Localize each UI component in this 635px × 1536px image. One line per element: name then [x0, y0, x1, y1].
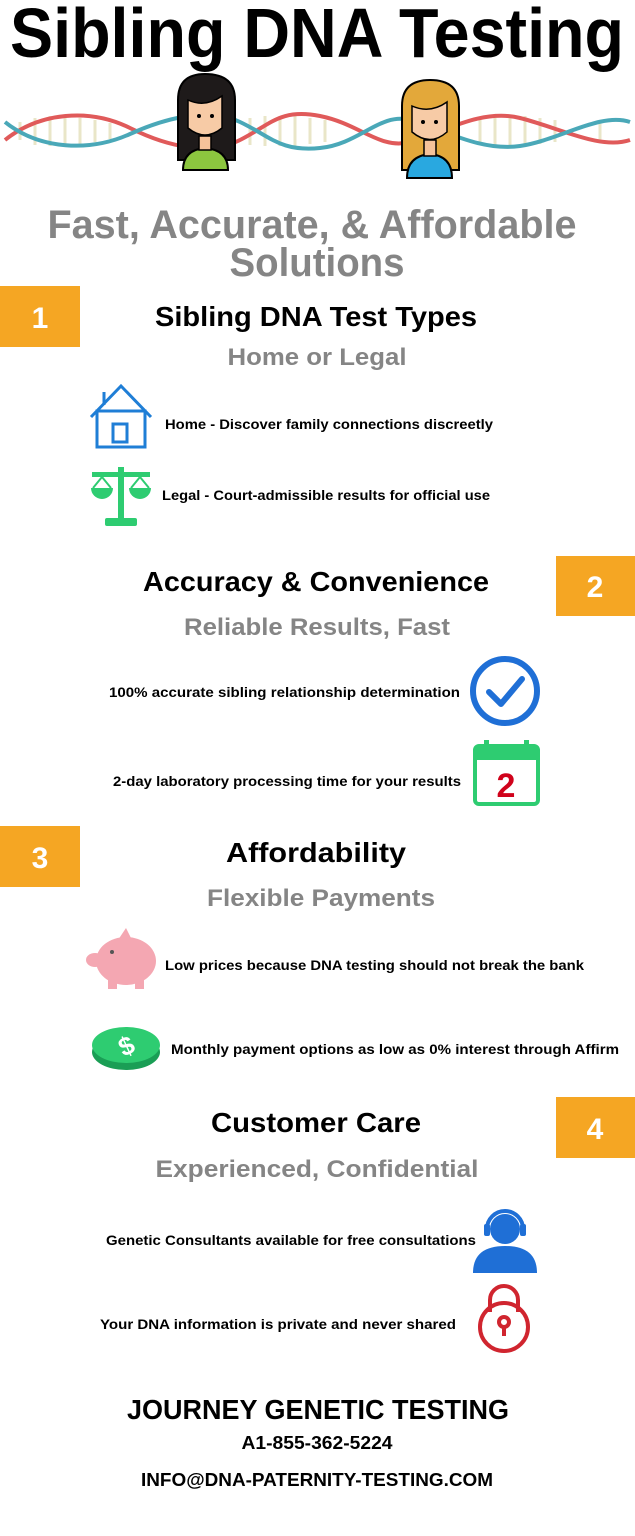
footer: company — [127, 1394, 509, 1490]
text: legal: Legal - Court-admissible results for official use — [162, 487, 490, 503]
footer: company: JOURNEY GENETIC TESTING — [127, 1394, 509, 1425]
badge 1: 1 — [32, 302, 48, 335]
section 2 heading — [143, 566, 489, 641]
section 1 heading: Home or Legal — [228, 344, 406, 371]
text: processing: 2-day laboratory processing time for your results — [113, 773, 461, 789]
subtitle — [48, 203, 576, 285]
section 3 heading: Affordability — [226, 837, 406, 868]
section 3 heading: Flexible Payments — [207, 885, 435, 912]
section 4 heading: Customer Care — [211, 1107, 421, 1138]
section 2 heading: Reliable Results, Fast — [184, 614, 450, 641]
subtitle: Solutions — [230, 241, 404, 285]
section 1 heading — [155, 301, 477, 371]
section 2 heading: Accuracy & Convenience — [143, 566, 489, 597]
badge 3 — [0, 826, 80, 887]
footer: company: INFO@DNA-PATERNITY-TESTING.COM — [141, 1470, 493, 1490]
icon: house — [91, 386, 151, 447]
text: home: Home - Discover family connections discreetly — [165, 416, 493, 432]
text: accuracy: 100% accurate sibling relationship determination — [109, 684, 460, 700]
section 3 heading — [207, 837, 435, 912]
footer: company: A1-855-362-5224 — [242, 1433, 392, 1453]
section 1 heading: Sibling DNA Test Types — [155, 301, 477, 332]
text: privacy: Your DNA information is private and never shared — [100, 1316, 456, 1332]
icon: check — [473, 659, 537, 723]
badge 4 — [556, 1097, 635, 1158]
icon: headset person — [473, 1211, 537, 1273]
badge 2 — [556, 556, 635, 616]
dna helix banner — [5, 114, 630, 149]
subtitle: Fast, Accurate, & Affordable — [48, 203, 576, 247]
badge 1 — [0, 286, 80, 347]
icon: coin: $ — [114, 1029, 140, 1063]
badge 3: 3 — [32, 842, 48, 875]
text: consultants: Genetic Consultants available for free consultations — [106, 1232, 476, 1248]
icon: calendar — [475, 740, 538, 805]
icon: calendar: 2 — [497, 767, 515, 805]
section 4 heading — [156, 1107, 479, 1183]
icon: coin — [92, 1027, 160, 1070]
icon: dark-haired sibling — [178, 74, 235, 170]
badge 2: 2 — [587, 571, 603, 604]
section 4 heading: Experienced, Confidential — [156, 1156, 479, 1183]
icon: scale — [91, 467, 151, 526]
icon: lock — [480, 1286, 528, 1351]
icon: blonde sibling — [402, 80, 459, 178]
text: monthly: Monthly payment options as low as 0% interest through Affirm — [171, 1041, 619, 1057]
badge 4: 4 — [587, 1113, 604, 1146]
icon: piggy bank — [86, 928, 156, 989]
text: low prices: Low prices because DNA testing should not break the bank — [165, 957, 584, 973]
